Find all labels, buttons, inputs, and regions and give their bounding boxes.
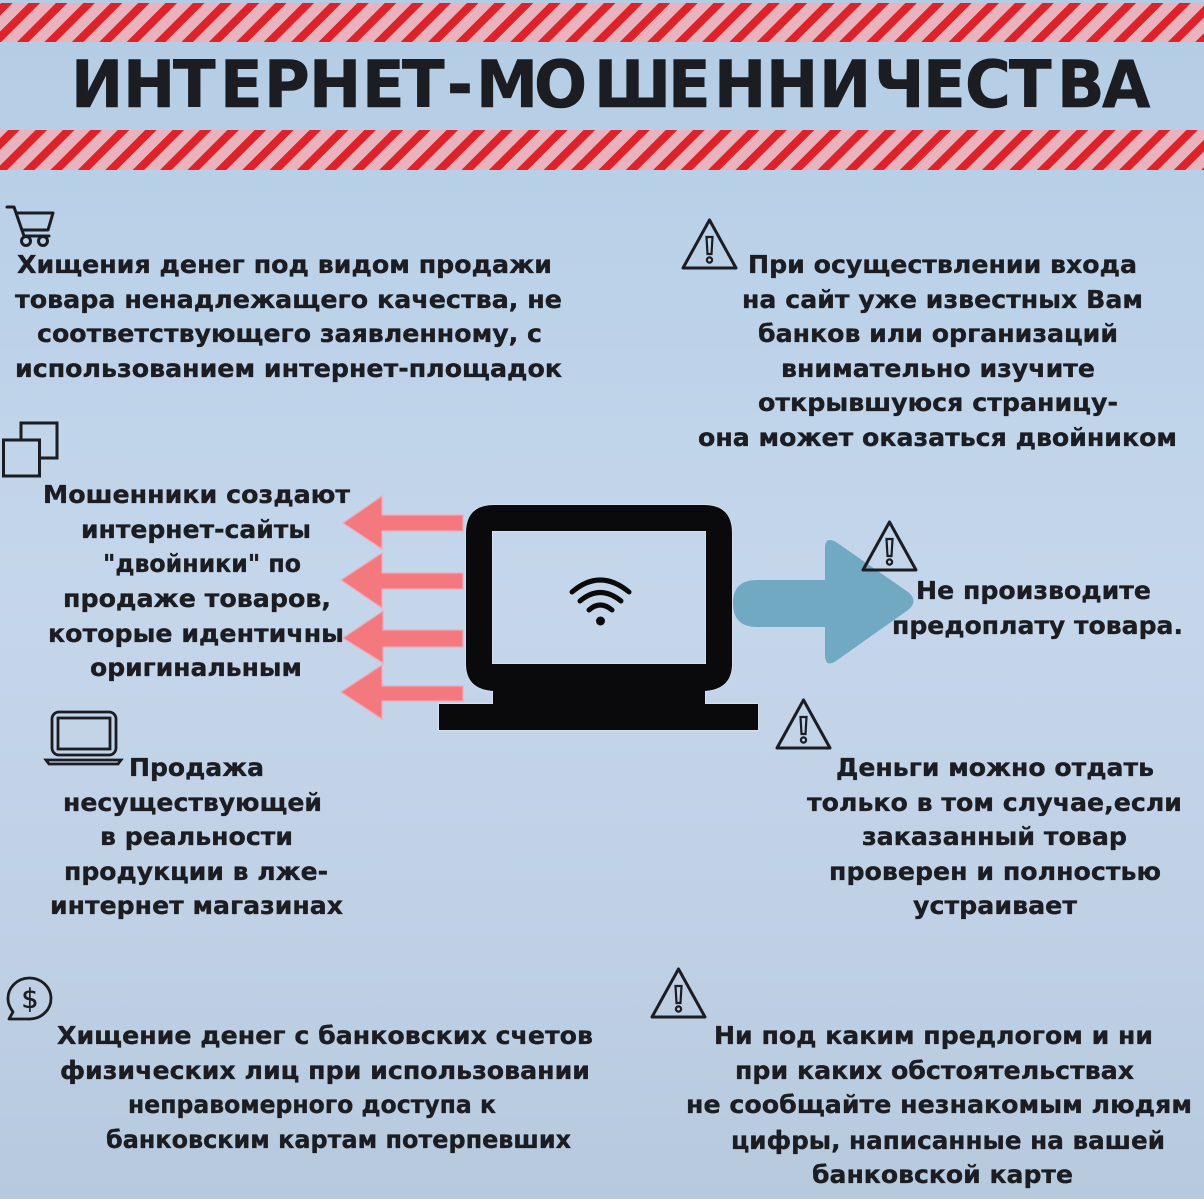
text: bank account theft bbox=[57, 1021, 593, 1154]
text: fake products: интернет магазинах bbox=[50, 891, 343, 920]
icon: warning triangle bbox=[863, 522, 916, 570]
text: goods fraud: Хищения денег под видом продажи bbox=[17, 250, 552, 279]
top striped band bbox=[0, 3, 1204, 42]
text: payment advice bbox=[807, 753, 1182, 920]
text: fake products: продукции в лже- bbox=[64, 857, 328, 886]
panel: login advice bbox=[683, 220, 1177, 452]
text: goods fraud: использованием интернет-площадок bbox=[15, 354, 562, 383]
icon: dollar speech bubble bbox=[8, 978, 51, 1019]
text: no prepayment: Не производите bbox=[916, 576, 1151, 605]
icon: dollar speech bubble: $ bbox=[21, 984, 39, 1015]
text: clone sites bbox=[43, 480, 351, 682]
panel: payment advice bbox=[777, 700, 1182, 920]
panel: bank account theft bbox=[8, 978, 593, 1154]
red arrows bbox=[341, 496, 463, 719]
panel: no prepayment bbox=[863, 522, 1183, 640]
text: bank account theft: Хищение денег с банковских счетов bbox=[57, 1021, 593, 1050]
text: clone sites: продаже товаров, bbox=[63, 584, 331, 613]
text: card number advice: не сообщайте незнакомым людям bbox=[686, 1090, 1192, 1119]
text: fake products: Продажа bbox=[129, 753, 264, 782]
text: goods fraud: соответствующего заявленному, с bbox=[37, 319, 542, 348]
text: clone sites: которые идентичны bbox=[48, 619, 344, 648]
laptop body bbox=[439, 505, 758, 730]
text: login advice: банков или организаций bbox=[758, 319, 1118, 348]
panel: fake products bbox=[46, 712, 343, 920]
icon: overlapping squares bbox=[4, 423, 57, 476]
laptop with wifi bbox=[439, 505, 758, 730]
text: card number advice: цифры, написанные на вашей bbox=[731, 1126, 1165, 1155]
panel: card number advice bbox=[652, 969, 1192, 1189]
text: goods fraud: товара ненадлежащего качества, не bbox=[15, 285, 562, 314]
text: card number advice: банковской карте bbox=[812, 1160, 1073, 1189]
text: login advice: открывшуюся страницу- bbox=[758, 388, 1118, 417]
text: login advice: на сайт уже известных Вам bbox=[742, 285, 1143, 314]
text: fake products: несуществующей bbox=[63, 788, 322, 817]
icon: warning triangle bbox=[652, 969, 705, 1017]
icon: warning triangle bbox=[683, 220, 736, 268]
text: bank account theft: банковским картам потерпевших bbox=[106, 1125, 571, 1154]
text: login advice: внимательно изучите bbox=[781, 354, 1095, 383]
bottom striped band bbox=[0, 130, 1204, 170]
icon: warning triangle bbox=[777, 700, 830, 748]
text: payment advice: заказанный товар bbox=[862, 822, 1127, 851]
text: no prepayment: предоплату товара. bbox=[892, 611, 1183, 640]
wifi icon bbox=[572, 580, 629, 626]
text: card number advice: при каких обстоятельствах bbox=[735, 1056, 1134, 1085]
text: card number advice: Ни под каким предлогом и ни bbox=[714, 1021, 1153, 1050]
text: fake products bbox=[50, 753, 343, 920]
title: ИНТЕРНЕТ-МОШЕННИЧЕСТВА bbox=[71, 48, 1150, 123]
text: bank account theft: физических лиц при использовании bbox=[60, 1056, 590, 1085]
text: payment advice: только в том случае,если bbox=[807, 788, 1182, 817]
text: login advice bbox=[698, 250, 1177, 452]
text: clone sites: Мошенники создают bbox=[43, 480, 351, 509]
blue arrow bbox=[733, 540, 914, 663]
text: goods fraud bbox=[15, 250, 562, 383]
icon: laptop outline bbox=[46, 712, 121, 764]
text: fake products: в реальности bbox=[100, 822, 293, 851]
text: payment advice: устраивает bbox=[913, 891, 1078, 920]
text: card number advice bbox=[686, 1021, 1192, 1189]
text: clone sites: интернет-сайты bbox=[81, 515, 311, 544]
text: clone sites: оригинальным bbox=[90, 653, 302, 682]
panel: clone sites bbox=[4, 423, 351, 682]
icon: shopping cart bbox=[7, 207, 53, 246]
text: payment advice: проверен и полностью bbox=[829, 857, 1161, 886]
text: payment advice: Деньги можно отдать bbox=[836, 753, 1154, 782]
text: login advice: При осуществлении входа bbox=[748, 250, 1137, 279]
text: clone sites: "двойники" по bbox=[103, 549, 301, 578]
text: login advice: она может оказаться двойником bbox=[698, 423, 1177, 452]
panel: goods fraud bbox=[7, 207, 562, 383]
text: no prepayment bbox=[892, 576, 1183, 640]
text: bank account theft: неправомерного доступа к bbox=[128, 1090, 496, 1119]
